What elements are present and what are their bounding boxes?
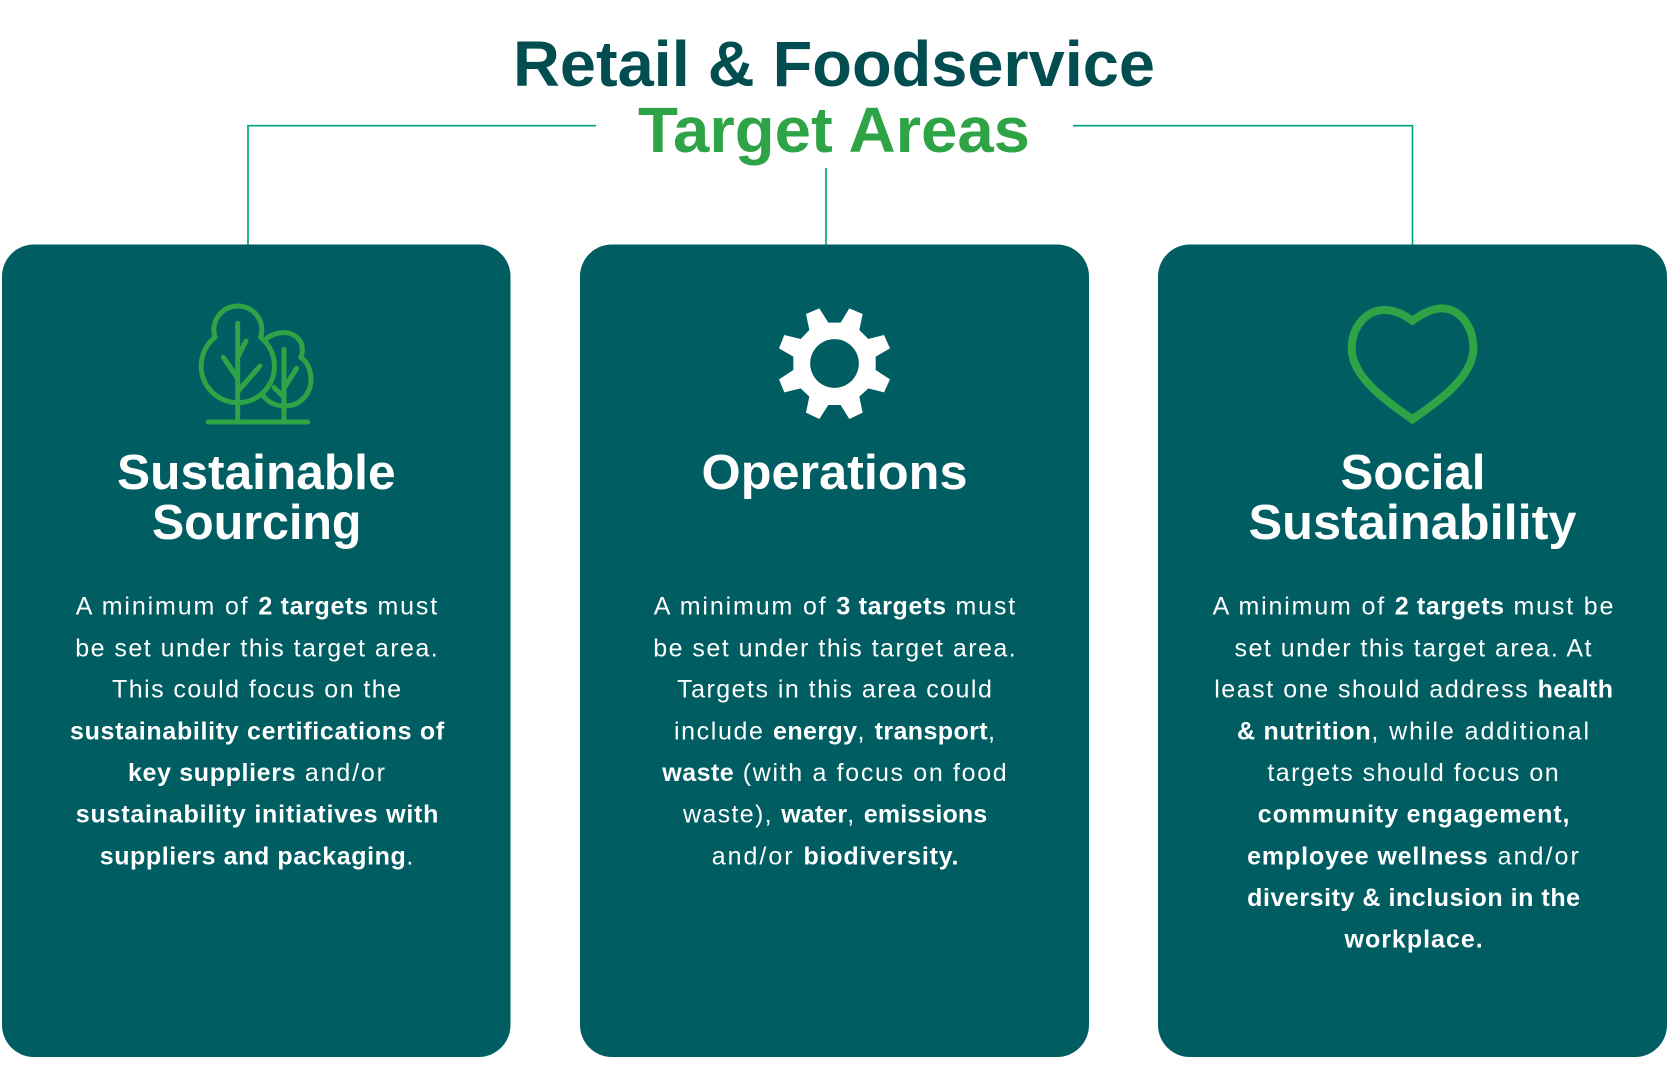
icon: heart: [1352, 308, 1473, 419]
heading: operations: Operations: [702, 446, 968, 500]
text: sustainable sourcing description: This could focus on the: [112, 676, 401, 704]
title: [513, 28, 1155, 166]
text: social sustainability description: least one should address health: [1214, 676, 1612, 704]
text: operations description: Targets in this area could: [677, 676, 992, 704]
text: sustainable sourcing description: A minimum of 2 targets must: [76, 592, 437, 620]
text: operations description: include energy, transport,: [674, 718, 995, 746]
text: social sustainability description: & nutrition, while additional: [1237, 718, 1589, 746]
heading: sustainable sourcing: Sourcing: [152, 496, 361, 550]
text: social sustainability description: [1213, 592, 1613, 954]
text: sustainable sourcing description: sustainability initiatives with: [76, 800, 437, 828]
text: operations description: waste), water, emissions: [682, 800, 986, 828]
text: social sustainability description: diversity & inclusion in the: [1247, 884, 1580, 912]
panel: operations: [580, 244, 1089, 1057]
panel: social sustainability: [1158, 244, 1667, 1057]
text: sustainable sourcing description: suppliers and packaging.: [100, 842, 413, 870]
text: operations description: waste (with a focus on food: [661, 759, 1007, 787]
text: sustainable sourcing description: key suppliers and/or: [128, 759, 385, 787]
title: Retail & Foodservice: [513, 28, 1155, 100]
text: social sustainability description: A minimum of 2 targets must be: [1213, 592, 1613, 620]
text: social sustainability description: targets should focus on: [1267, 759, 1559, 787]
heading: sustainable sourcing: Sustainable: [117, 446, 396, 500]
connector: left: [248, 126, 596, 245]
text: social sustainability description: community engagement,: [1258, 800, 1568, 828]
text: social sustainability description: workplace.: [1344, 926, 1482, 954]
text: sustainable sourcing description: be set under this target area.: [75, 634, 438, 662]
text: sustainable sourcing description: sustainability certifications of: [70, 718, 445, 746]
connector: right: [1073, 126, 1412, 245]
text: social sustainability description: employee wellness and/or: [1247, 842, 1579, 870]
text: operations description: be set under this target area.: [653, 634, 1016, 662]
icon: trees: [201, 306, 311, 422]
heading: sustainable sourcing: [117, 446, 396, 550]
text: social sustainability description: set under this target area. At: [1234, 634, 1592, 662]
heading: social sustainability: Sustainability: [1248, 496, 1576, 550]
text: operations description: [653, 592, 1016, 870]
text: operations description: A minimum of 3 targets must: [654, 592, 1015, 620]
title: Target Areas: [638, 94, 1030, 166]
heading: social sustainability: [1248, 446, 1576, 550]
connector: centre: [825, 168, 827, 245]
text: operations description: and/or biodiversity.: [712, 842, 958, 870]
icon: gear: [779, 308, 890, 419]
text: sustainable sourcing description: [70, 592, 445, 870]
heading: social sustainability: Social: [1340, 446, 1486, 500]
panel: sustainable sourcing: [2, 244, 510, 1057]
